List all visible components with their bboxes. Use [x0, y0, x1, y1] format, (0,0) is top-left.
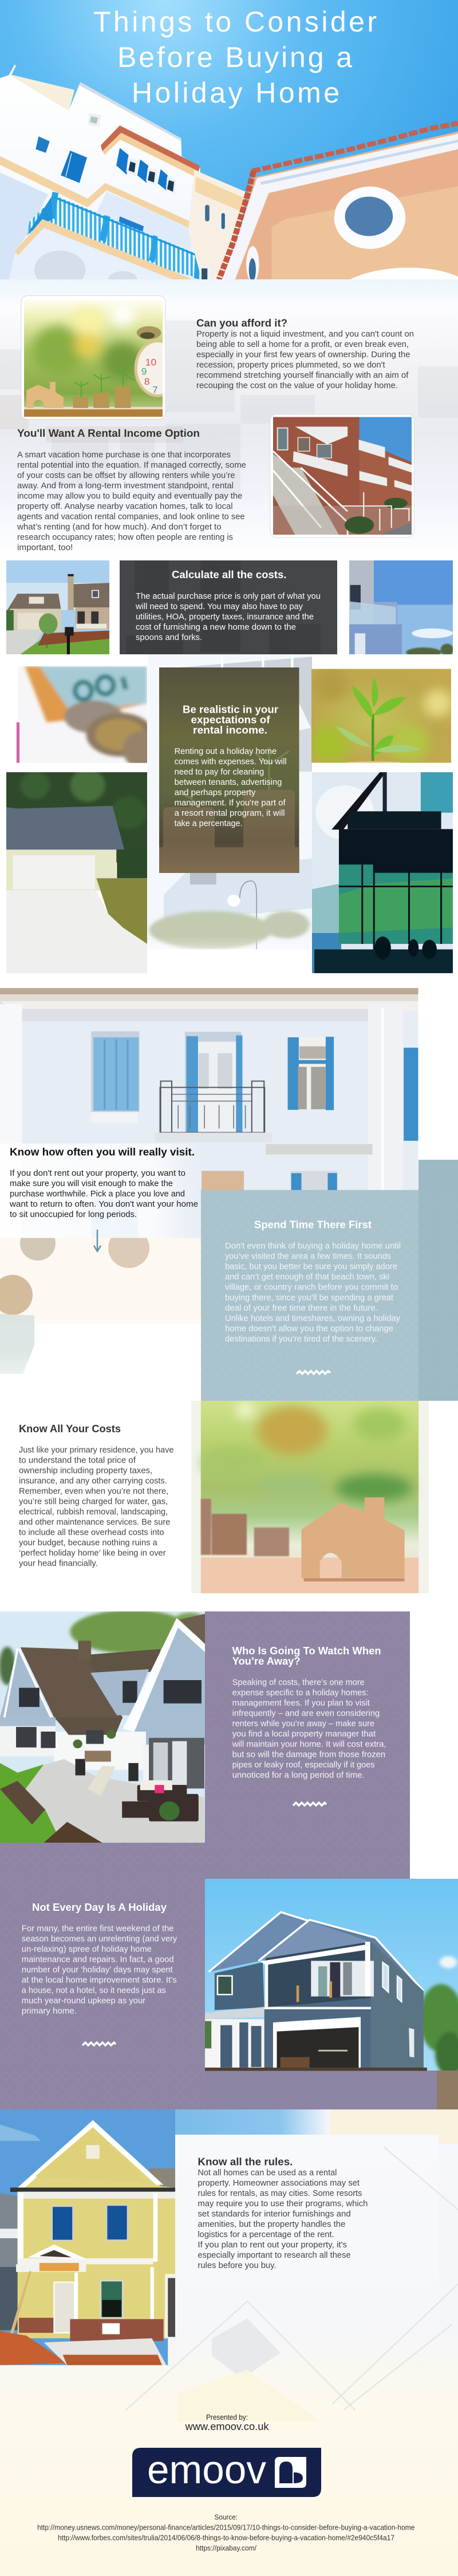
panel body: infrequently – and are even considering [232, 1709, 380, 1718]
panel body: Renting out a holiday home [175, 747, 277, 756]
hero header [0, 0, 458, 289]
photo: money note and coins [16, 666, 147, 763]
section: not every day is a holiday [0, 1843, 458, 2110]
panel body: comes with expenses. You will [175, 757, 287, 767]
heading: You'll Want A Rental Income Option [17, 428, 200, 439]
photo: glass balcony overlooking lake and mountains [312, 772, 453, 973]
background: pale modern building behind photo grid [148, 654, 312, 949]
photo: wooden house and coin stacks [191, 1401, 429, 1594]
sources: https://pixabay.com/ [196, 2544, 256, 2552]
panel body: buying there, since you’ll be spending a great [225, 1294, 393, 1303]
panel body: Unlike hotels and timeshares, owning a holiday [225, 1314, 401, 1323]
panel heading: Calculate all the costs. [172, 569, 286, 580]
heading: Know All Your Costs [19, 1423, 121, 1435]
panel heading: Be realistic in your [183, 704, 278, 716]
body text: you’re still being charged for water, gas, [19, 1498, 168, 1507]
row: rental income expectations [6, 666, 453, 973]
sources: http://www.forbes.com/sites/trulia/2014/06/06/8-things-to-know-before-buying-a-vacation-home/#2e940c5f4a17 [58, 2534, 394, 2542]
panel body: Speaking of costs, there’s one more [232, 1678, 365, 1688]
photo: modern building with glass balcony [349, 560, 453, 654]
body text [17, 451, 246, 552]
panel body: expense specific to a holiday homes: [232, 1689, 369, 1698]
body text: rules for rentals, as may cities. Some resorts [198, 2189, 362, 2198]
panel body: management. If you're part of [175, 799, 286, 808]
panel body: unnoticed for a long period of time. [232, 1771, 365, 1780]
panel body: between tenants, advertising [175, 778, 282, 787]
body text: much year-round upkeep as your [22, 1997, 145, 2006]
panel body: spoons and forks. [136, 633, 202, 642]
photo: suburban house with mailbox [6, 560, 109, 654]
body text: to understand the total price of [19, 1456, 136, 1465]
panel body: will maintain your home. It will cost extra, [232, 1740, 386, 1749]
card: clock, coins and wooden house photo: 7 [152, 385, 158, 395]
panel body: basic, but you better be sure you simply adore [225, 1262, 397, 1271]
panel body: and perhaps property [175, 788, 256, 797]
body text: a house, not a hotel, so it needs just as [22, 1986, 166, 1996]
body text: to include all these overhead costs into [19, 1528, 164, 1538]
photo: white house with blue shutters and balcony [0, 988, 418, 1238]
body text: purchase worthwhile. Pick a place you love and [10, 1190, 185, 1199]
panel heading: Who Is Going To Watch When [232, 1645, 381, 1657]
panel heading: Spend Time There First [254, 1219, 372, 1231]
card: brick apartments photo [270, 414, 414, 538]
heading: Not Every Day Is A Holiday [32, 1902, 167, 1913]
body text: especially important to research all these [198, 2251, 351, 2260]
body text: make sure you will visit enough to make the [10, 1179, 173, 1188]
panel body: will need to spend. You may also have to pay [135, 602, 303, 611]
body text: ‘perfect holiday home’ like being in over [19, 1549, 166, 1558]
body text: un-relaxing) spree of holiday home [22, 1945, 152, 1954]
card: clock, coins and wooden house photo: 10 [145, 357, 156, 368]
section: know how often you will really visit [0, 988, 418, 1251]
icon: door [275, 2457, 306, 2488]
body text: research occupancy rates; how often people are renting is [17, 533, 233, 542]
body text: logistics for a percentage of the rent. [198, 2230, 334, 2239]
panel body: and can’t get enough of that beach town, ski [225, 1273, 389, 1282]
panel body: need to pay for cleaning [175, 768, 264, 777]
body text: A smart vacation home purchase is one that incorporates [17, 451, 231, 460]
panel body: village, or country ranch before you commit to [225, 1283, 398, 1292]
photo: blue two-storey house with open garage [205, 1879, 458, 2109]
heading: Know how often you will really visit. [10, 1146, 195, 1157]
body text: income may allow you to build equity and eventually pay the [17, 492, 242, 501]
panel: spend time there first [201, 1160, 458, 1401]
purple strip below photo [205, 2071, 437, 2110]
body text: may require you to use their programs, which [198, 2199, 368, 2208]
panel body: cost of furnishing a new home down to the [136, 623, 296, 632]
wave divider [293, 1803, 326, 1805]
panel body: utilities, HOA, property taxes, insurance and the [136, 613, 314, 622]
photo: blue house with patio [0, 1611, 205, 1843]
body text: primary home. [22, 2007, 77, 2016]
panel body: renters while you’re away – make sure [232, 1720, 374, 1729]
wave divider [297, 1371, 330, 1374]
row: calculate all the costs [6, 560, 453, 657]
panel body: management fees. If you plan to visit [232, 1699, 370, 1708]
photo: green sprout [311, 669, 451, 762]
body text: recouping the cost on the value of your holiday home. [196, 381, 398, 390]
panel body: you find a local property manager that [232, 1730, 376, 1739]
body text: to sit unoccupied for long periods. [10, 1210, 137, 1219]
body text: especially in your first few years of ownership. During the [196, 350, 410, 359]
body text: your budget, because nothing ruins a [19, 1539, 158, 1548]
panel heading: expectations of [191, 714, 271, 726]
panel body: but so will the damage from those frozen [232, 1751, 385, 1760]
panel body: pipes or leaky roof, especially if it goes [232, 1761, 375, 1770]
body text [198, 2168, 368, 2270]
body text: set standards for interior furnishings and [198, 2210, 351, 2219]
arrow [94, 1230, 101, 1251]
panel body: a resort rental program, it will [175, 809, 285, 818]
body text: recession, property prices plummeted, so we don't [196, 361, 385, 370]
body text: recommend stretching yourself financially with an aim of [196, 371, 409, 380]
body text [22, 1925, 177, 2016]
panel body: home doesn’t allow you the option to change [225, 1325, 393, 1334]
panel heading: You’re Away? [232, 1656, 301, 1667]
panel body: The actual purchase price is only part of what you [136, 592, 321, 601]
section: can you afford it [21, 295, 414, 419]
body text [19, 1446, 173, 1568]
panel heading [183, 704, 278, 736]
card: clock, coins and wooden house photo: 8 [144, 377, 150, 387]
panel: not every day is a holiday background [0, 1843, 205, 2109]
body text: at the local home improvement store. It’s [22, 1976, 177, 1985]
panel heading [232, 1645, 381, 1667]
faded town background [0, 279, 458, 560]
panel heading: rental income. [193, 725, 267, 736]
body text: season becomes an unrelenting (and very [22, 1935, 177, 1944]
section: rental income option [17, 414, 414, 552]
body text: Remember, even when you’re not there, [19, 1487, 168, 1496]
body text: electrical, rubbish removal, landscaping, [19, 1508, 168, 1517]
hero photo: white and peach buildings against blue sky [0, 0, 458, 279]
panel body: Don't even think of buying a holiday home until [225, 1242, 401, 1251]
card: clock, coins and wooden house photo [21, 295, 181, 419]
title: Things to Consider [93, 6, 377, 38]
sources [37, 2513, 415, 2552]
body text [196, 330, 414, 390]
title [93, 6, 377, 109]
body text: Just like your primary residence, you have [19, 1446, 173, 1455]
photo: yellow house under construction [0, 2109, 175, 2365]
body text: maintenance and repairs. In fact, a good [22, 1955, 174, 1965]
body text: amenities, but the property handles the [198, 2220, 345, 2229]
body text: away. And from a long-term investment standpoint, rental [17, 481, 234, 491]
panel body [135, 592, 321, 642]
body text: If you plan to rent out your property, it's [198, 2241, 347, 2250]
body text: rules before you buy. [198, 2261, 277, 2270]
presented by: Presented by: [206, 2413, 248, 2421]
body text: For many, the entire first weekend of the [22, 1925, 174, 1934]
body text: property. Homeowner associations may set [198, 2179, 360, 2188]
body text: ownership including property taxes, [19, 1467, 152, 1476]
section: know all the rules [0, 2109, 458, 2576]
section: know all your costs [19, 1401, 429, 1593]
body text: your head financially. [19, 1559, 98, 1568]
body text: number of your ‘holiday’ days may spent [22, 1966, 173, 1975]
footer [37, 2413, 415, 2552]
wave divider [82, 2042, 116, 2045]
panel body: take a percentage. [175, 819, 243, 828]
body text: and other maintenance services. Be sure [19, 1518, 170, 1527]
body text: Not all homes can be used as a rental [198, 2168, 337, 2178]
panel: be realistic [159, 667, 299, 873]
sources: Source: [214, 2513, 238, 2521]
website: www.emoov.co.uk [184, 2421, 270, 2432]
body text: important, too! [17, 543, 73, 552]
sources: http://money.usnews.com/money/personal-finance/articles/2015/09/17/10-things-to-consider-before-buying-a-vacation-home [37, 2524, 415, 2532]
panel body: deal of your free time there in the future. [225, 1304, 378, 1313]
body text: being able to sell a home for a profit, or even break even, [196, 340, 409, 349]
panel body: you’ve visited the area a few times. It sounds [225, 1252, 391, 1261]
body text: agents and vacation rental companies, and look online to see [17, 512, 245, 521]
body text: property off. Analyse nearby vacation homes, talk to local [17, 502, 233, 511]
panel body: destinations if you’re tired of the scenery. [225, 1335, 377, 1344]
card: clock, coins and wooden house photo: 9 [141, 366, 147, 377]
body text [9, 1169, 198, 1219]
title: Holiday Home [132, 77, 339, 109]
body text: rental potential into the equation. If managed correctly, some [17, 461, 246, 470]
body text: what’s renting (and for how much). And don’t forget to [17, 523, 222, 532]
background: fading coins and notes [0, 1238, 201, 1374]
photo: house with garage and driveway [6, 772, 147, 973]
logo [132, 2447, 321, 2497]
body text: of your costs can be offset by allowing renters while you’re [17, 471, 235, 480]
body text: insurance, and any other carrying costs. [19, 1477, 167, 1486]
heading: Can you afford it? [196, 317, 287, 329]
title: Before Buying a [117, 41, 352, 73]
body text: Property is not a liquid investment, and you can't count on [196, 330, 414, 339]
panel body [225, 1242, 401, 1344]
heading: Know all the rules. [198, 2156, 293, 2167]
panel: who is going to watch [205, 1611, 410, 1879]
body text: want to return to often. You don't want your home [9, 1200, 198, 1209]
panel body [232, 1678, 386, 1780]
background: sketched house watermark fading to cream [0, 2109, 458, 2576]
logo: emoov [147, 2447, 266, 2492]
panel body [175, 747, 287, 828]
body text: If you don't rent out your property, you want to [10, 1169, 185, 1178]
panel: calculate all the costs [120, 560, 337, 654]
